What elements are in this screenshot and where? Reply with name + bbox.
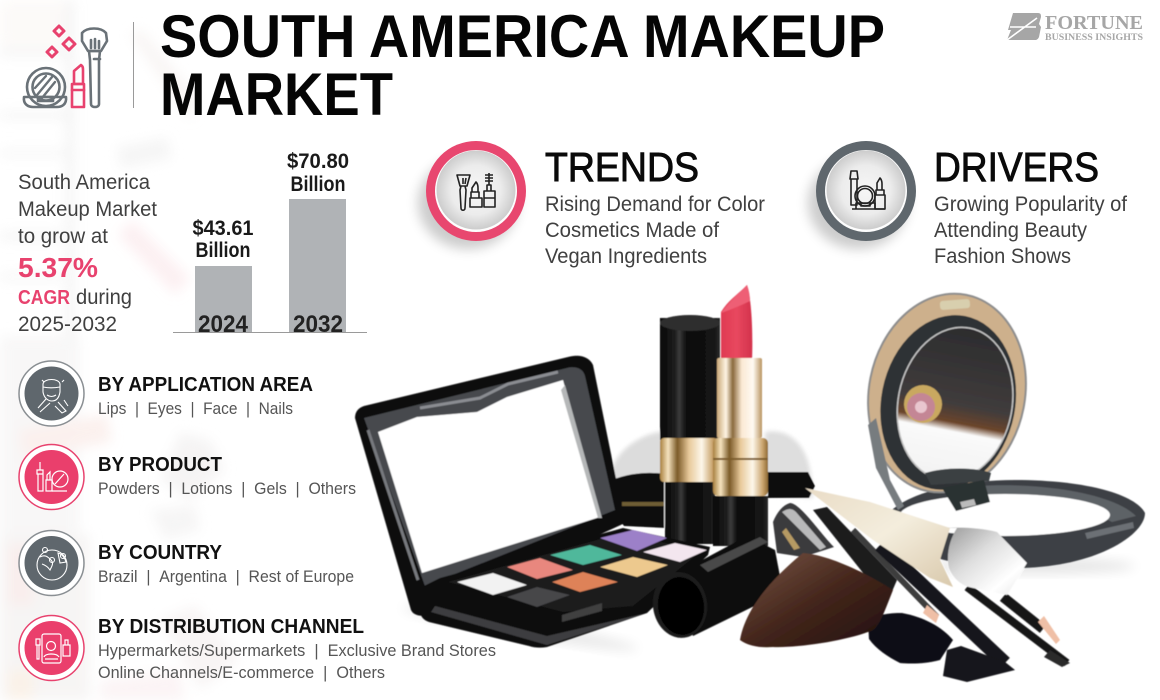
CAGR text block: 2025-2032: [18, 313, 117, 336]
photo: round compact: [851, 280, 1145, 574]
photo: brushes and pencils: [740, 503, 1070, 682]
heading: BY DISTRIBUTION CHANNEL: [98, 616, 364, 638]
brown fan brush: [740, 553, 893, 647]
text: trends description: [545, 193, 765, 268]
bar chart: $43.61: [192, 217, 254, 240]
photo: shadow compact behind lipstick: [610, 431, 815, 528]
photo: lipstick cap: [649, 536, 783, 641]
icon: product: [19, 444, 84, 510]
logo: Fortune Business Insights: FORTUNE: [1045, 12, 1143, 34]
bar chart: $70.80: [287, 150, 349, 173]
icon: compact: [24, 68, 66, 107]
heading: drivers: DRIVERS: [934, 144, 1099, 190]
photo: red lipstick: [713, 285, 768, 546]
photo: cosmetics product group: [355, 280, 1145, 682]
text: trends description: Vegan Ingredients: [545, 245, 707, 268]
logo: Fortune Business Insights: [1007, 12, 1143, 43]
logo: Fortune Business Insights: BUSINESS INSIGHTS: [1045, 33, 1143, 43]
heading: BY APPLICATION AREA: [98, 374, 313, 396]
icon: drivers badge: [808, 141, 916, 249]
bar chart: 2032: [293, 311, 343, 338]
bar chart: 2024: [198, 311, 249, 338]
black brush: [868, 613, 953, 664]
panel: by distribution channel: [19, 616, 496, 682]
CAGR text block: 5.37%: [18, 252, 98, 283]
panel: by product: [19, 444, 356, 510]
icon: lipstick: [72, 65, 84, 107]
icon: sparkles: [47, 26, 75, 57]
background watermark: [0, 0, 240, 700]
panel: trends: [418, 141, 765, 268]
text: trends description: Rising Demand for Color: [545, 193, 765, 216]
palette base: [420, 528, 710, 648]
icon: brush: [82, 28, 107, 107]
CAGR text block: [18, 171, 157, 336]
CAGR text block: CAGR: [18, 287, 70, 309]
bar chart: Billion: [196, 239, 250, 262]
segments: Online Channels/E-commerce | Others: [98, 663, 385, 682]
bar chart: Billion: [290, 173, 346, 196]
icon: distribution channel: [19, 616, 84, 680]
CAGR text block: during: [76, 286, 132, 309]
text: drivers description: [934, 193, 1127, 268]
eyeshadow pans: [457, 530, 707, 607]
CAGR text block: Makeup Market: [18, 198, 157, 221]
photo: foundation tube: [805, 488, 1027, 595]
photo: eyeshadow palette: [355, 356, 710, 657]
title: SOUTH AMERICA MAKEUP: [160, 3, 885, 70]
heading: BY COUNTRY: [98, 542, 223, 564]
silver brush ferrule: [773, 503, 834, 557]
title: [160, 3, 885, 128]
divider: [133, 22, 134, 108]
CAGR text block: South America: [18, 171, 150, 194]
text: drivers description: Attending Beauty: [934, 219, 1087, 242]
segments: Brazil | Argentina | Rest of Europe: [98, 567, 354, 586]
icon: trends badge: [418, 141, 526, 249]
CAGR text block: to grow at: [18, 225, 108, 248]
photo: black lipstick tube: [660, 315, 720, 544]
bar chart: [173, 150, 367, 338]
panel: drivers: [808, 141, 1127, 268]
icon: application area: [19, 361, 84, 426]
photo: compact mirror lid: [851, 280, 1043, 506]
heading: BY PRODUCT: [98, 454, 222, 476]
heading: trends: TRENDS: [545, 144, 699, 190]
palette lid: [355, 356, 625, 616]
panel: by country: [19, 530, 354, 596]
text: drivers description: Fashion Shows: [934, 245, 1071, 268]
text: drivers description: Growing Popularity of: [934, 193, 1127, 216]
title: MARKET: [160, 61, 393, 128]
segments: Hypermarkets/Supermarkets | Exclusive Brand Stores: [98, 641, 496, 660]
panel: by application area: [19, 361, 313, 426]
icon: country: [19, 530, 84, 596]
header icon: makeup set: [24, 26, 107, 107]
segments: [98, 641, 496, 682]
segments: Lips | Eyes | Face | Nails: [98, 399, 293, 418]
handles: [813, 507, 897, 603]
segments: Powders | Lotions | Gels | Others: [98, 479, 356, 498]
text: trends description: Cosmetics Made of: [545, 219, 719, 242]
